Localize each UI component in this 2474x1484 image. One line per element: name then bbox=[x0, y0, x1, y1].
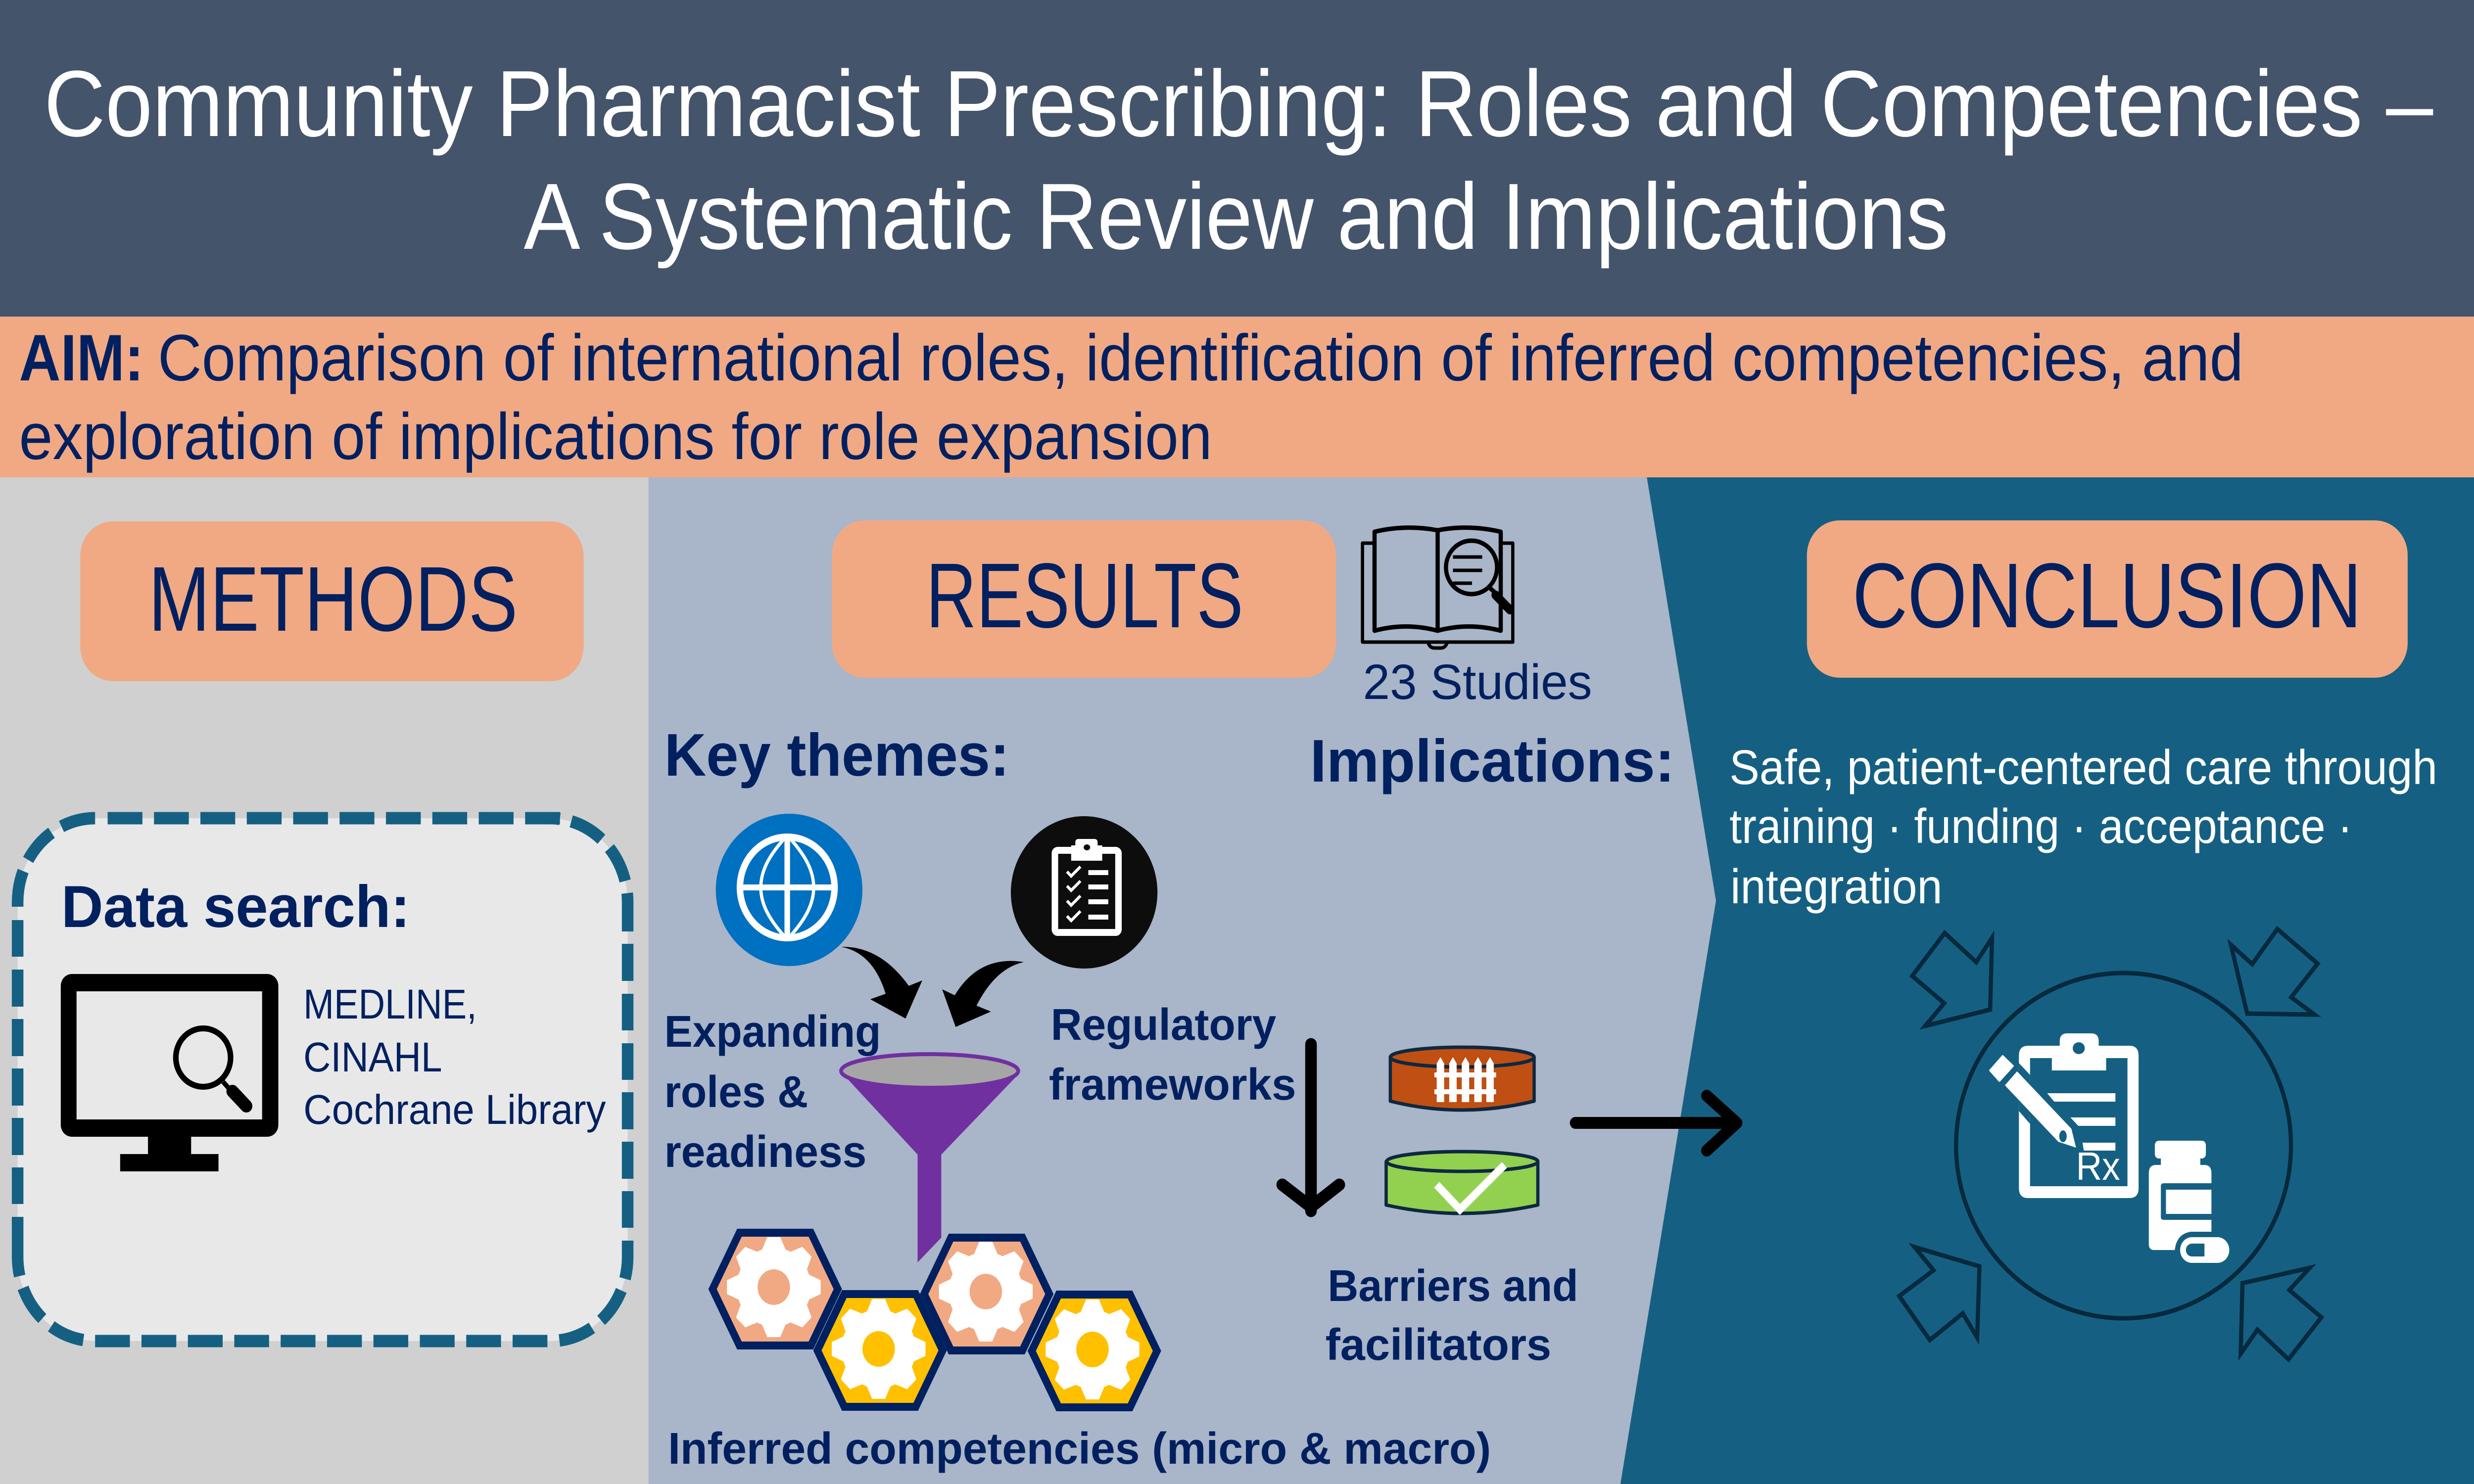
heading: results bbox=[832, 520, 1336, 678]
conclusion text: training · funding · acceptance · bbox=[1729, 799, 2352, 854]
icon: facilitator cylinder bbox=[1386, 1152, 1538, 1213]
hexagon gear 3 bbox=[924, 1238, 1049, 1350]
heading: methods: METHODS bbox=[148, 548, 518, 650]
expanding roles label: readiness bbox=[665, 1127, 866, 1177]
conclusion text: Safe, patient-centered care through bbox=[1729, 741, 2437, 795]
conclusion text: integration bbox=[1730, 860, 1943, 914]
database list bbox=[303, 981, 606, 1133]
database list: Cochrane Library bbox=[303, 1087, 606, 1133]
implications heading: Implications: bbox=[1310, 728, 1675, 795]
key themes heading: Key themes: bbox=[665, 722, 1009, 789]
heading: results: RESULTS bbox=[926, 545, 1243, 647]
icon: prescription clipboard: Rx bbox=[2076, 1145, 2120, 1189]
expanding roles label: roles & bbox=[665, 1067, 808, 1117]
icon: converging arrows and circle bbox=[1899, 929, 2322, 1359]
arrow outline: bottom left bbox=[1899, 1247, 1980, 1340]
panel: methods background bbox=[0, 477, 649, 1484]
heading: conclusion: CONCLUSION bbox=[1853, 545, 2362, 647]
icon: book with magnifier bbox=[1363, 528, 1513, 648]
barriers and facilitators label: facilitators bbox=[1326, 1320, 1551, 1370]
title: A Systematic Review and Implications bbox=[524, 164, 1949, 269]
arrow: toward conclusion bbox=[1575, 1096, 1737, 1151]
icon: competency hexagons bbox=[713, 1233, 1157, 1407]
arrow: clipboard to funnel bbox=[942, 961, 1024, 1027]
regulatory frameworks label: Regulatory bbox=[1051, 1000, 1277, 1050]
conclusion text bbox=[1729, 741, 2437, 914]
aim band bbox=[0, 317, 2474, 477]
icon: funnel bbox=[841, 1054, 1019, 1262]
data search heading: Data search: bbox=[61, 874, 410, 940]
hexagon gear 1 bbox=[713, 1233, 838, 1345]
aim text: exploration of implications for role expansion bbox=[19, 400, 1212, 473]
arrow: down to barriers bbox=[1282, 1044, 1339, 1211]
panel: data search bbox=[18, 818, 628, 1341]
arrow outline: bottom right bbox=[2240, 1268, 2322, 1359]
icon: monitor with magnifier bbox=[61, 974, 279, 1171]
hexagon gear 2 bbox=[817, 1294, 943, 1407]
circle outline bbox=[1956, 973, 2291, 1318]
icon: prescription clipboard bbox=[1990, 1033, 2139, 1198]
panel: results background bbox=[649, 477, 1669, 1484]
heading: methods bbox=[80, 521, 583, 681]
heading: conclusion bbox=[1807, 520, 2408, 678]
database list: MEDLINE, bbox=[303, 981, 477, 1028]
database list: CINAHL bbox=[303, 1034, 442, 1081]
regulatory frameworks label bbox=[1049, 1000, 1296, 1110]
expanding roles label bbox=[665, 1007, 881, 1177]
panel: conclusion background bbox=[1620, 477, 2474, 1484]
header band with title bbox=[0, 0, 2474, 317]
expanding roles label: Expanding bbox=[665, 1007, 881, 1057]
arrow outline: top left bbox=[1912, 933, 1992, 1026]
arrow: globe to funnel bbox=[841, 947, 922, 1019]
barriers and facilitators label: Barriers and bbox=[1328, 1261, 1578, 1311]
icon: clipboard checklist bbox=[1011, 816, 1157, 969]
icon: globe bbox=[716, 814, 862, 966]
aim text: AIM: bbox=[19, 321, 144, 395]
studies count: 23 Studies bbox=[1363, 654, 1592, 710]
aim text: Comparison of international roles, identification of inferred competencies, and bbox=[158, 321, 2243, 395]
aim text bbox=[19, 321, 2243, 473]
icon: barrier cylinder bbox=[1390, 1047, 1534, 1110]
barriers and facilitators label bbox=[1326, 1261, 1578, 1370]
icon: medicine bottle and pill bbox=[2149, 1141, 2229, 1263]
inferred competencies label: Inferred competencies (micro & macro) bbox=[668, 1424, 1491, 1474]
arrow outline: top right bbox=[2231, 929, 2318, 1015]
regulatory frameworks label: frameworks bbox=[1049, 1060, 1296, 1110]
hexagon gear 4 bbox=[1032, 1295, 1157, 1407]
title bbox=[44, 51, 2433, 269]
title: Community Pharmacist Prescribing: Roles and Competencies – bbox=[44, 51, 2433, 156]
